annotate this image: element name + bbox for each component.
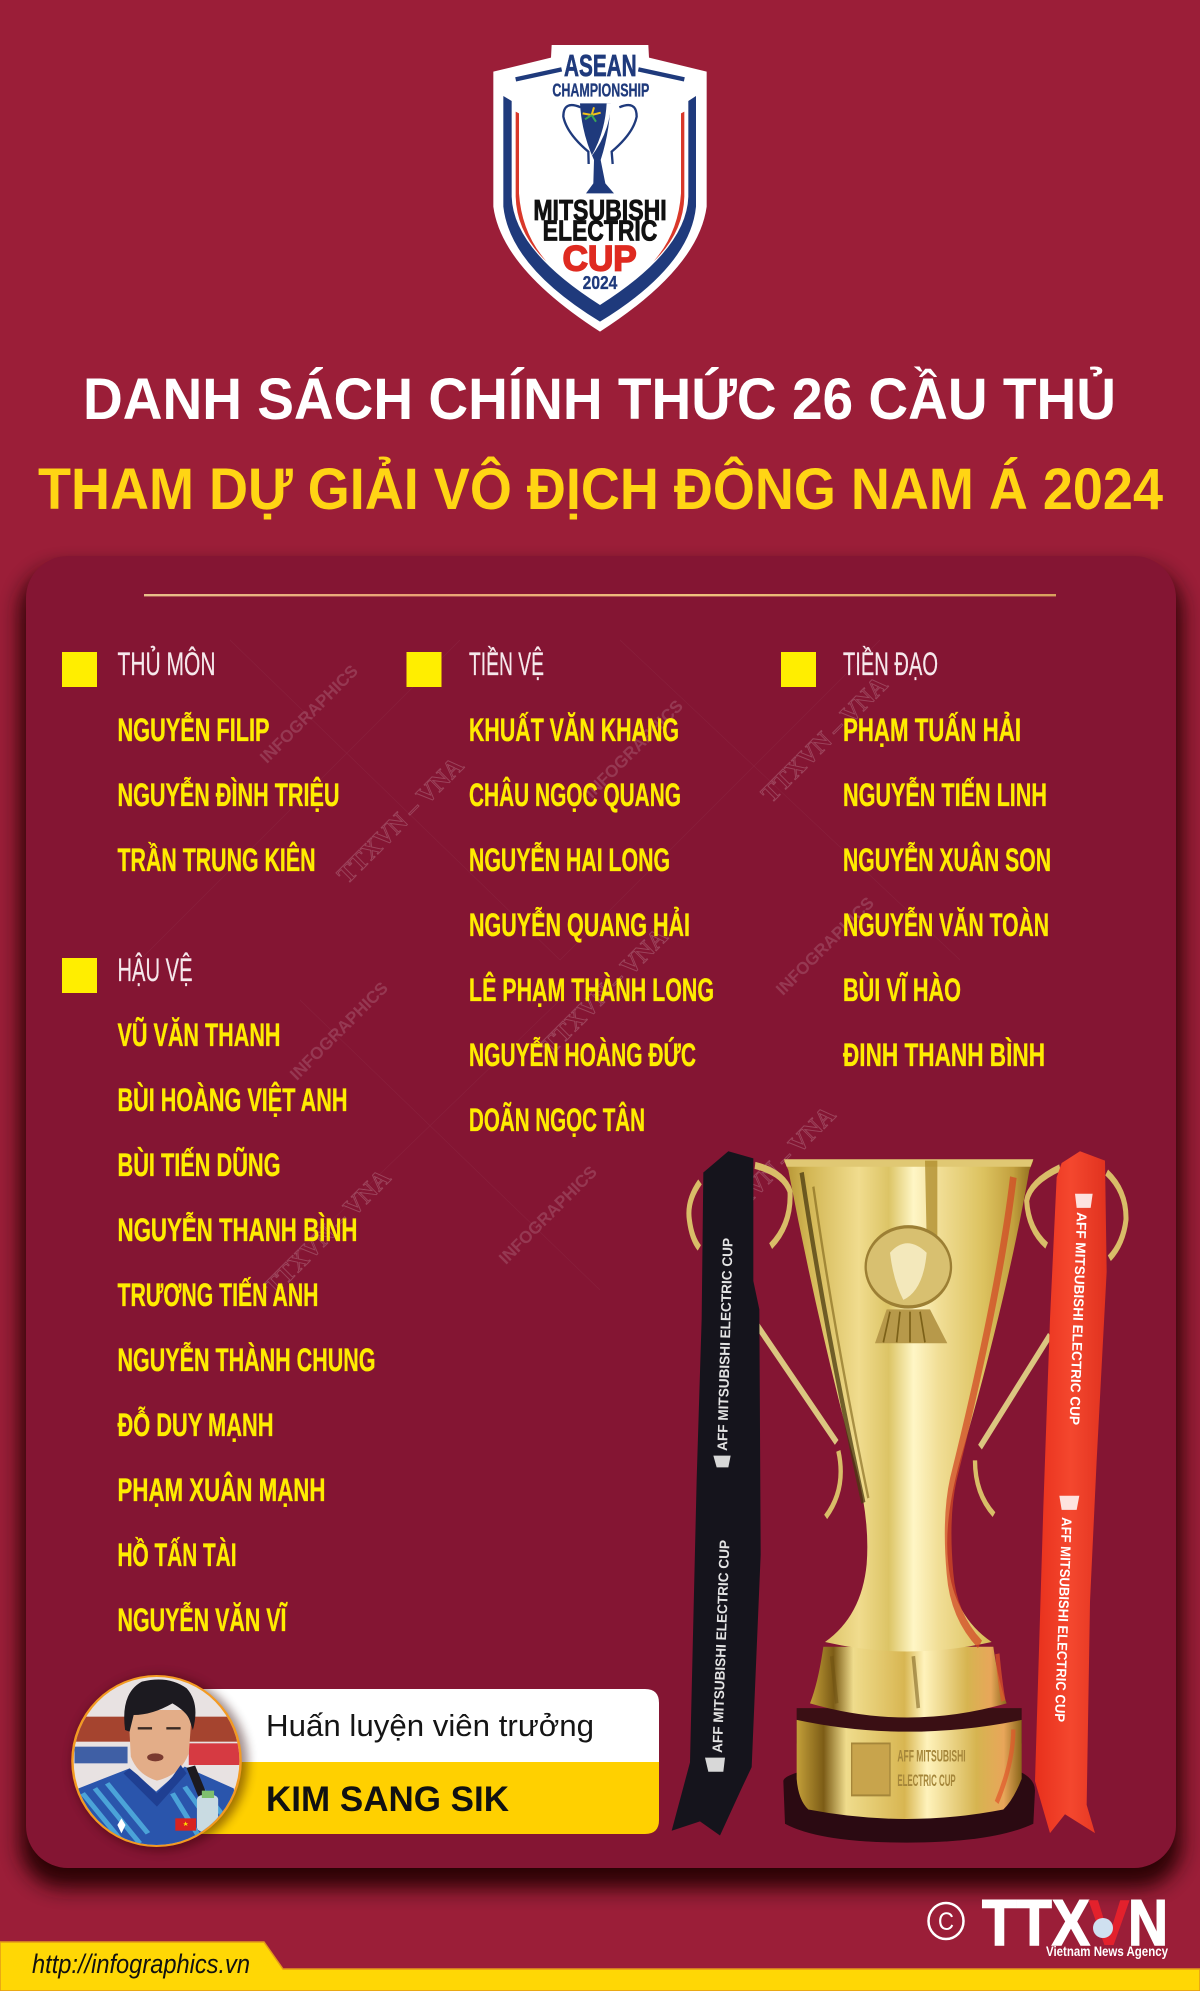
group: defenders: BÙI HOÀNG VIỆT ANH xyxy=(118,1082,348,1118)
coach name band xyxy=(150,1762,659,1834)
group: defenders: NGUYỄN THÀNH CHUNG xyxy=(118,1342,376,1378)
group: goalkeepers: TRẦN TRUNG KIÊN xyxy=(118,842,316,878)
group: forwards: TIỀN ĐẠO xyxy=(843,646,938,682)
TTXVN logo: N xyxy=(1128,1886,1168,1959)
watermarks: INFOGRAPHICS xyxy=(286,978,392,1084)
image: trophy with ribbons: AFF MITSUBISHI ELECTRIC CUP xyxy=(714,1238,736,1451)
group: forwards xyxy=(781,646,1051,1073)
coach title band xyxy=(150,1689,659,1762)
divider line xyxy=(144,594,1056,596)
watermarks xyxy=(140,640,960,1301)
group: midfielders: NGUYỄN HAI LONG xyxy=(469,842,670,878)
group: forwards: NGUYỄN XUÂN SON xyxy=(843,842,1051,878)
image: trophy with ribbons: AFF MITSUBISHI xyxy=(897,1748,966,1766)
TTXVN logo: TTX xyxy=(982,1886,1090,1959)
group: goalkeepers: THỦ MÔN xyxy=(118,646,216,682)
copyright symbol: C xyxy=(938,1908,954,1936)
panel: squad list xyxy=(26,556,1176,1868)
image: trophy with ribbons: AFF MITSUBISHI ELECTRIC CUP xyxy=(709,1540,732,1753)
image: trophy with ribbons: AFF MITSUBISHI ELECTRIC CUP xyxy=(1067,1212,1090,1425)
title line 1: DANH SÁCH CHÍNH THỨC 26 CẦU THỦ xyxy=(83,367,1116,432)
watermarks: INFOGRAPHICS xyxy=(256,661,362,767)
TTXVN logo xyxy=(982,1886,1168,1959)
group: midfielders: NGUYỄN HOÀNG ĐỨC xyxy=(469,1037,696,1073)
image: trophy with ribbons: AFF MITSUBISHI ELECTRIC CUP xyxy=(1052,1517,1075,1722)
group: defenders: HẬU VỆ xyxy=(118,952,192,988)
logo: ASEAN Championship Mitsubishi Electric Cup 2024 xyxy=(493,45,707,332)
watermarks: TTXVN – VNA xyxy=(704,1101,841,1238)
group: defenders: TRƯƠNG TIẾN ANH xyxy=(118,1277,318,1313)
watermarks: INFOGRAPHICS xyxy=(495,1162,601,1268)
watermarks: INFOGRAPHICS xyxy=(581,696,687,802)
footer URL: http://infographics.vn xyxy=(32,1949,250,1979)
group: defenders: PHẠM XUÂN MẠNH xyxy=(118,1472,326,1508)
group: forwards: NGUYỄN VĂN TOÀN xyxy=(843,907,1049,943)
coach card xyxy=(66,1670,659,1851)
group: forwards: NGUYỄN TIẾN LINH xyxy=(843,777,1047,813)
panel shadow xyxy=(20,568,1182,1888)
logo: ASEAN Championship Mitsubishi Electric Cup 2024: ASEAN xyxy=(564,49,637,83)
group: defenders: VŨ VĂN THANH xyxy=(118,1017,280,1053)
TTXVN logo: V xyxy=(1088,1886,1130,1959)
coach portrait xyxy=(66,1670,246,1850)
TTXVN logo: Vietnam News Agency xyxy=(1046,1944,1168,1959)
coach portrait shadow xyxy=(72,1675,248,1851)
group: midfielders: TIỀN VỆ xyxy=(469,646,544,682)
logo: ASEAN Championship Mitsubishi Electric Cup 2024: CUP xyxy=(563,240,637,279)
logo: ASEAN Championship Mitsubishi Electric Cup 2024: 2024 xyxy=(583,272,618,293)
group: defenders: ĐỖ DUY MẠNH xyxy=(118,1407,274,1443)
logo: ASEAN Championship Mitsubishi Electric Cup 2024: MITSUBISHI xyxy=(533,195,667,227)
group: goalkeepers xyxy=(62,646,340,878)
group: goalkeepers: NGUYỄN ĐÌNH TRIỆU xyxy=(118,777,340,813)
watermarks: TTXVN – VNA xyxy=(259,1164,396,1301)
watermarks: TTXVN – VNA xyxy=(536,923,673,1060)
group: midfielders xyxy=(406,646,714,1138)
group: forwards: BÙI VĨ HÀO xyxy=(843,972,961,1008)
group: defenders: HỒ TẤN TÀI xyxy=(118,1537,236,1573)
image: trophy with ribbons xyxy=(672,1151,1126,1843)
group: defenders: NGUYỄN THANH BÌNH xyxy=(118,1212,358,1248)
group: midfielders: KHUẤT VĂN KHANG xyxy=(469,712,679,748)
group: midfielders: NGUYỄN QUANG HẢI xyxy=(469,907,690,943)
group: goalkeepers: NGUYỄN FILIP xyxy=(118,712,270,748)
coach role: Huấn luyện viên trưởng xyxy=(266,1708,594,1743)
watermarks: TTXVN – VNA xyxy=(756,671,893,808)
copyright symbol xyxy=(928,1903,964,1939)
group: defenders xyxy=(62,952,376,1638)
group: defenders: BÙI TIẾN DŨNG xyxy=(118,1147,280,1183)
watermarks: TTXVN – VNA xyxy=(332,752,469,889)
group: forwards: ĐINH THANH BÌNH xyxy=(843,1037,1045,1073)
logo: ASEAN Championship Mitsubishi Electric Cup 2024: ELECTRIC xyxy=(543,216,657,248)
watermarks: INFOGRAPHICS xyxy=(772,893,878,999)
group: midfielders: DOÃN NGỌC TÂN xyxy=(469,1102,645,1138)
group: midfielders: LÊ PHẠM THÀNH LONG xyxy=(469,972,714,1008)
logo: ASEAN Championship Mitsubishi Electric Cup 2024: CHAMPIONSHIP xyxy=(552,80,649,101)
group: defenders: NGUYỄN VĂN VĨ xyxy=(118,1602,288,1638)
coach name: KIM SANG SIK xyxy=(266,1780,509,1819)
group: forwards: PHẠM TUẤN HẢI xyxy=(843,712,1021,748)
footer: yellow bar with URL tab xyxy=(0,1942,1200,1991)
group: midfielders: CHÂU NGỌC QUANG xyxy=(469,777,681,813)
image: trophy with ribbons: ELECTRIC CUP xyxy=(897,1772,956,1791)
